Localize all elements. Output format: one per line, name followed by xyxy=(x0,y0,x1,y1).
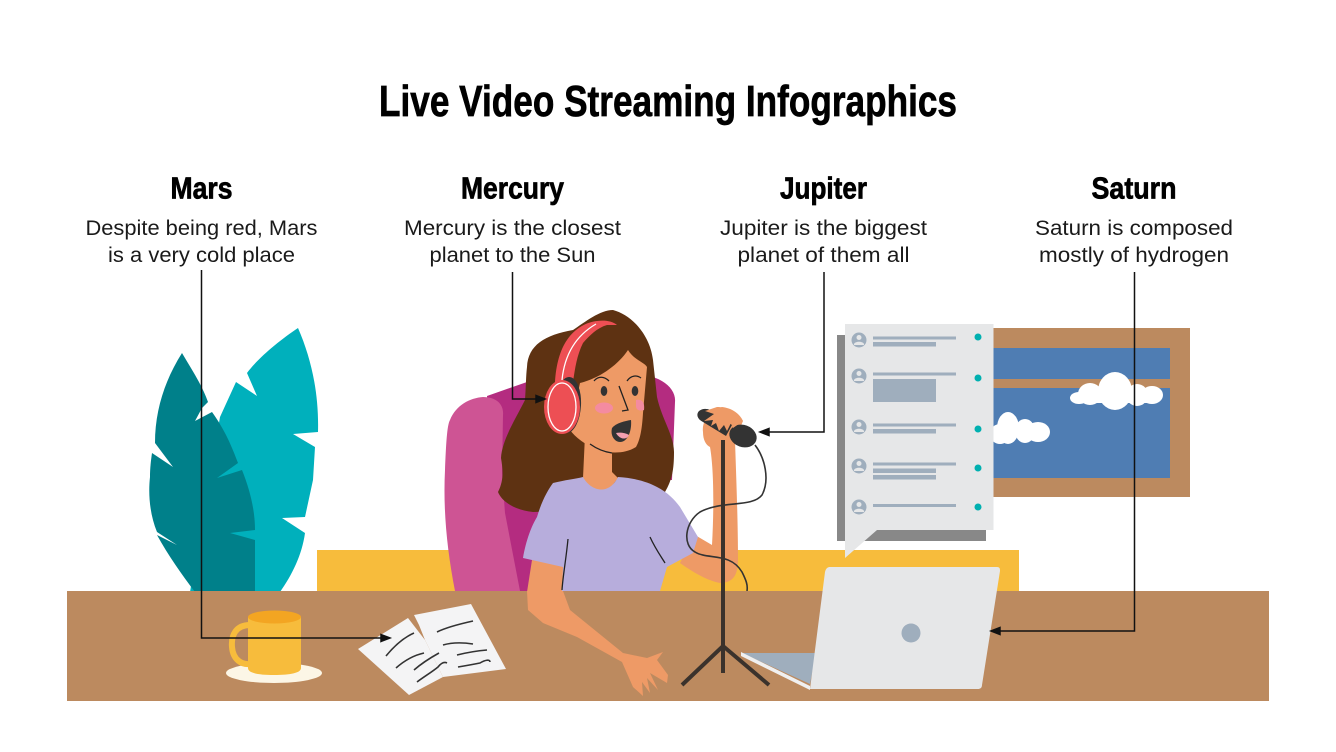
column: Jupiter: Jupiter is the biggest xyxy=(720,217,927,240)
desk xyxy=(67,591,1269,701)
arm raised xyxy=(680,407,743,583)
face xyxy=(570,350,647,452)
arrow: Mars xyxy=(202,270,390,642)
column: Saturn: Saturn is composed xyxy=(1035,217,1233,240)
shirt xyxy=(523,477,698,591)
arrow: Mercury xyxy=(512,272,545,402)
hair xyxy=(498,310,674,512)
mic cable xyxy=(687,445,766,591)
column: Mercury: Mercury is the closest xyxy=(404,217,621,240)
papers xyxy=(358,604,506,695)
woman xyxy=(498,310,766,592)
microphone xyxy=(697,407,760,451)
title: Live Video Streaming Infographics xyxy=(379,77,957,126)
laptop xyxy=(741,567,1000,690)
bench xyxy=(317,550,1019,592)
mic stand xyxy=(682,440,769,685)
column: Mars: is a very cold place xyxy=(108,244,295,267)
column: Jupiter xyxy=(720,170,927,267)
forearm on desk xyxy=(527,591,668,696)
mug and saucer xyxy=(226,610,322,683)
upper arm left xyxy=(527,560,565,592)
neck xyxy=(583,435,618,495)
column: Mercury: planet to the Sun xyxy=(430,244,596,267)
chat panel xyxy=(837,324,994,558)
column: Saturn xyxy=(1035,170,1233,267)
headphones xyxy=(544,321,617,434)
column: Jupiter: planet of them all xyxy=(738,244,910,267)
column: Mars xyxy=(86,170,318,267)
column: Saturn: mostly of hydrogen xyxy=(1039,244,1229,267)
plant: leaves xyxy=(149,328,318,592)
column: Mercury: Mercury xyxy=(461,170,565,206)
column: Saturn: Saturn xyxy=(1092,170,1176,206)
facial features xyxy=(594,376,644,442)
window xyxy=(990,328,1190,497)
chair xyxy=(444,376,675,592)
arrow: Saturn xyxy=(991,272,1134,634)
column: Mercury xyxy=(404,170,621,267)
column: Mars: Mars xyxy=(170,170,232,206)
column: Mars: Despite being red, Mars xyxy=(86,217,318,240)
arrow: Jupiter xyxy=(760,272,824,436)
column: Jupiter: Jupiter xyxy=(780,170,867,206)
